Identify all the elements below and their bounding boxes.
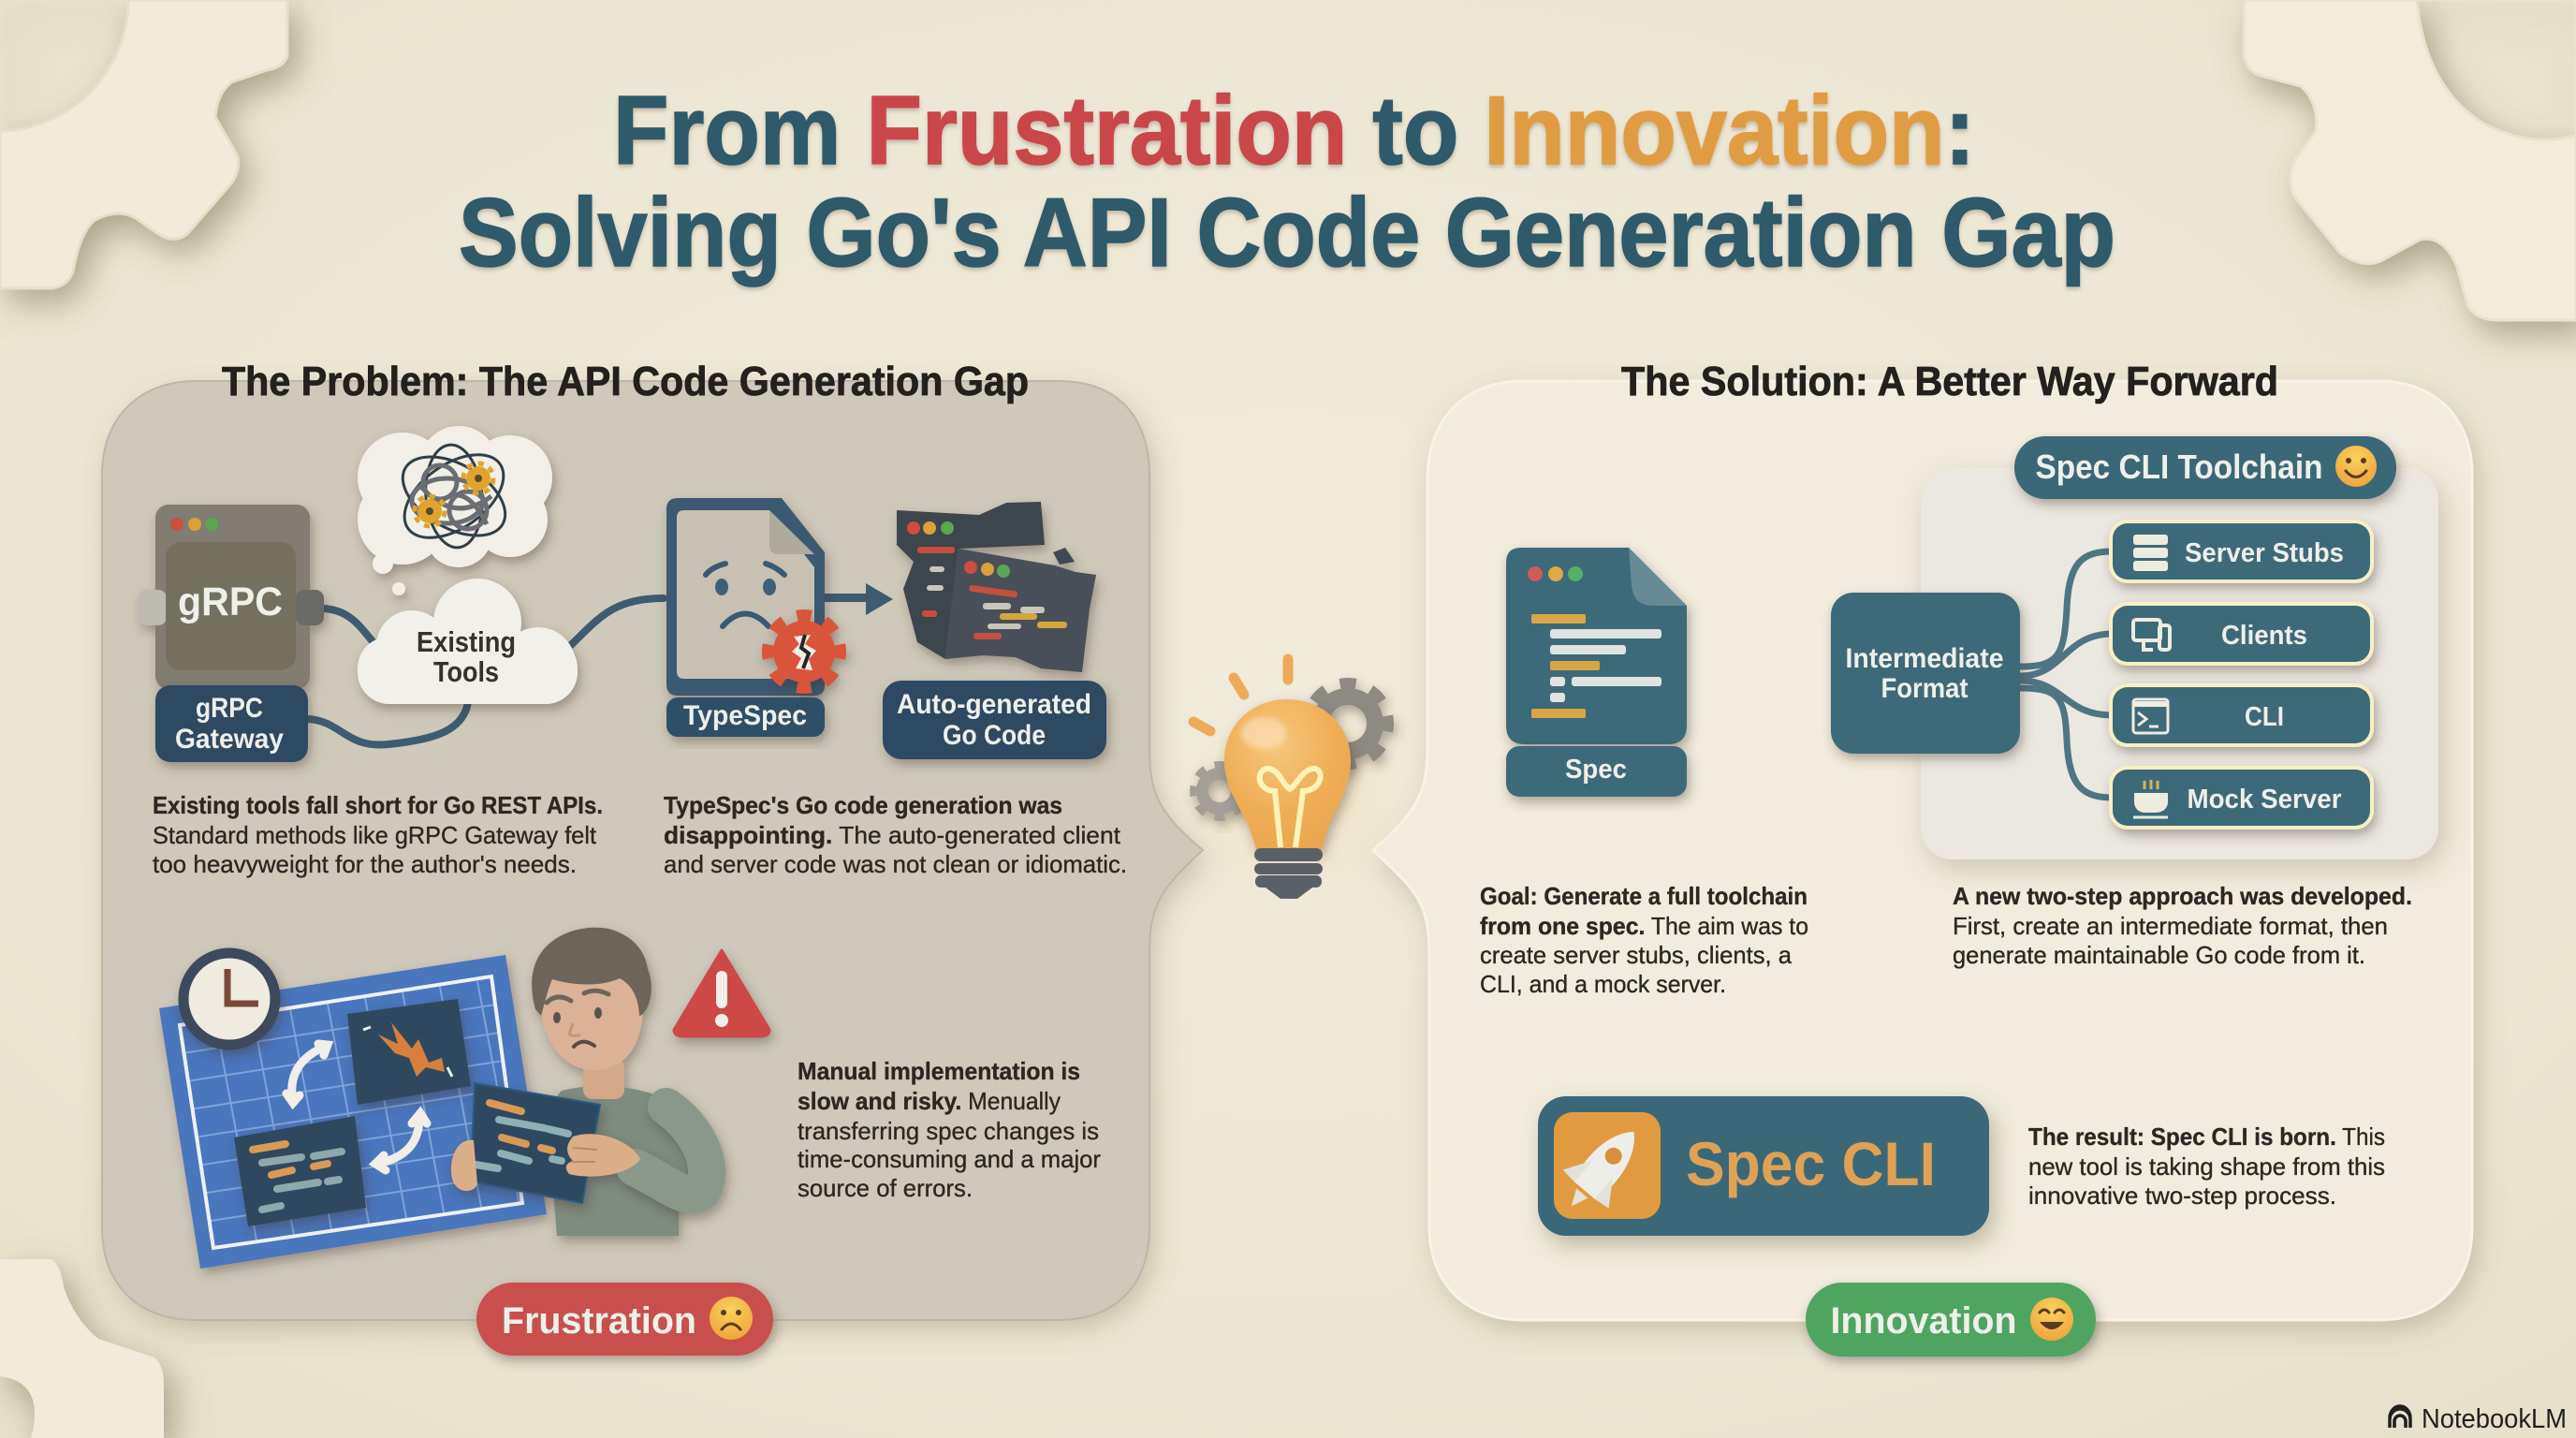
text: manual implementation: source of errors. [798,1174,973,1202]
text: two-step approach: A new two-step approach was developed. [1953,882,2412,910]
label: grpc gateway: Gateway [175,724,284,755]
icon: clock [183,953,275,1045]
icon: lightbulb [1224,699,1351,899]
text: existing tools: too heavyweight for the author's needs. [153,850,577,878]
icon: broken code card [347,999,471,1105]
label: typespec: TypeSpec [683,700,807,731]
icon: large gear [1308,683,1388,764]
text: manual implementation: time-consuming and a major [798,1145,1101,1173]
output: clients: Clients [2221,621,2307,651]
text: two-step approach: First, create an intermediate format, then [1953,912,2388,940]
output: server stubs [2109,520,2374,583]
label: spec: Spec [1565,755,1627,785]
logo: notebooklm: NotebookLM [2422,1404,2567,1434]
label: auto-generated go code: Auto-generated [897,689,1091,720]
arrow: typespec to generated code [822,583,893,615]
output: cli: CLI [2245,702,2284,732]
icon: warning triangle [674,950,769,1036]
text: the result: new tool is taking shape from this [2028,1152,2385,1181]
text: the result: The result: Spec CLI is born. This [2028,1123,2385,1151]
icon: existing tools cloud: Tools [433,655,499,688]
logo: spec cli [1538,1096,1989,1236]
text: typespec: and server code was not clean or idiomatic. [664,850,1127,878]
text: existing tools [153,791,603,878]
output: mock server [2109,766,2374,829]
badge: frustration: Frustration [502,1300,696,1342]
text: goal: from one spec. The aim was to [1480,912,1808,940]
text: existing tools: Existing tools fall short for Go REST APIs. [153,791,603,819]
panel: spec cli toolchain backing [1921,468,2438,859]
badge: frustration [476,1283,773,1356]
icon: exchange arrows [286,1044,427,1170]
illustration: blueprint board [159,955,547,1269]
title [459,77,2115,287]
badge: spec cli toolchain [2014,436,2396,499]
label: auto-generated go code [883,681,1106,759]
text: goal: create server stubs, clients, a [1480,941,1793,969]
text: typespec [664,791,1127,878]
icon: tangled thought cloud [358,426,552,595]
icon: sad typespec document [666,498,825,696]
text: typespec: disappointing. The auto-generated client [664,821,1121,849]
label: auto-generated go code: Go Code [943,720,1046,751]
decorative gear: top left [0,0,287,288]
text: goal: CLI, and a mock server. [1480,970,1726,998]
panel: solution [1373,381,2472,1320]
title: From Frustration to Innovation: [613,77,1975,185]
heading: the problem: The Problem: The API Code Generation Gap [222,359,1029,404]
output: server stubs: Server Stubs [2185,538,2344,568]
decorative gear: bottom left [0,1259,164,1438]
text: manual implementation [798,1057,1101,1202]
text: typespec: TypeSpec's Go code generation was [664,791,1062,819]
text: goal [1480,882,1808,998]
connectors: grpc to existing tools [308,598,664,745]
badge: innovation: Innovation [1831,1300,2016,1342]
badge: innovation [1806,1283,2096,1357]
text: the result [2028,1123,2385,1210]
logo: spec cli: Spec CLI [1686,1129,1936,1198]
icon: spec document [1506,548,1687,744]
icon: code card [234,1116,366,1226]
label: grpc gateway: gRPC [196,693,263,724]
icon: tablet with code [451,1083,707,1203]
output: mock server: Mock Server [2187,785,2342,814]
title: Solving Go's API Code Generation Gap [459,179,2115,287]
text: goal: Goal: Generate a full toolchain [1480,882,1808,910]
icon: light rays [1193,659,1288,731]
badge: spec cli toolchain: Spec CLI Toolchain [2035,448,2323,486]
decorative gear: top right [2244,0,2576,320]
text: two-step approach: generate maintainable Go code from it. [1953,941,2365,969]
label: typespec [666,697,825,737]
text: the result: innovative two-step process. [2028,1181,2336,1210]
icon: small gear [1193,765,1246,817]
icon: existing tools cloud: Existing [417,625,516,658]
heading: the solution: The Solution: A Better Way Forward [1621,359,2278,404]
text: manual implementation: slow and risky. Menually [798,1087,1061,1115]
illustration: worried developer [532,928,693,1236]
text: two-step approach [1953,882,2412,969]
icon: broken code windows [897,502,1096,672]
icon: existing tools cloud [358,579,578,704]
icon: grpc server box [139,505,324,689]
node: intermediate format: Format [1881,673,1968,704]
output: cli [2109,683,2374,747]
panel: problem [102,381,1203,1320]
icon: broken red gear [768,615,841,688]
connectors: intermediate format to outputs [2020,551,2113,798]
text: manual implementation: Manual implementation is [798,1057,1080,1085]
icon: grpc server box: gRPC [178,580,283,624]
node: intermediate format [1831,593,2020,754]
text: manual implementation: transferring spec changes is [798,1117,1099,1145]
glow behind bulb [1189,688,1404,903]
label: grpc gateway [155,685,308,762]
text: existing tools: Standard methods like gRPC Gateway felt [153,821,597,849]
node: intermediate format: Intermediate [1846,643,2003,674]
label: spec [1506,746,1687,797]
output: clients [2109,602,2374,666]
